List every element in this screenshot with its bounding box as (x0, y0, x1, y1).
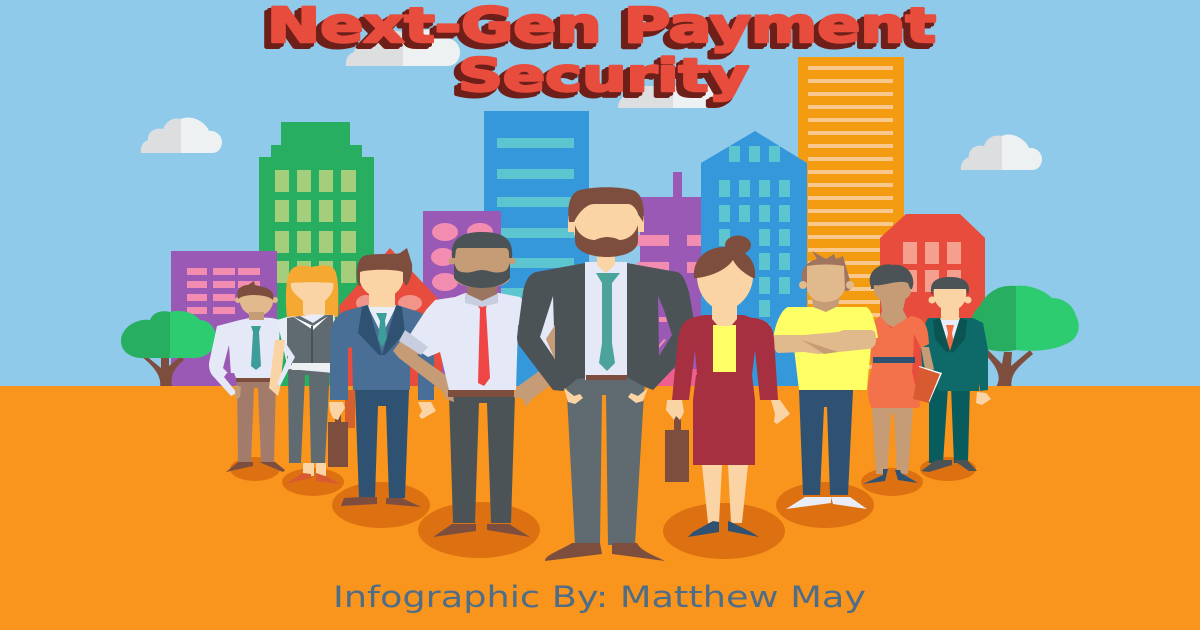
building: red right (880, 214, 985, 387)
building: blue peaked (701, 131, 807, 387)
person: woman in grey vest (269, 265, 341, 484)
cloud: top left (346, 29, 460, 66)
building: purple centre with ovals (423, 211, 501, 387)
title line one: extruded shadow: Next-Gen Payment (264, 1, 933, 57)
building: orange tower (798, 57, 904, 387)
building: green tower (259, 122, 374, 387)
building: purple left (171, 251, 277, 387)
person: man in yellow t-shirt (773, 251, 878, 509)
title line two: Security (458, 49, 749, 102)
title (261, 0, 936, 107)
byline: Infographic By: Matthew May (333, 580, 866, 614)
tree: right (971, 286, 1079, 391)
title line one: extruded shadow: Next-Gen Payment (261, 3, 930, 59)
person: central bearded man in grey suit (517, 187, 697, 561)
person: teal suit man (921, 277, 991, 472)
title line two: extruded shadow: Security (455, 52, 746, 105)
sky (0, 0, 1200, 387)
tree: left (121, 311, 216, 387)
cloud: right (961, 135, 1042, 170)
person: woman in orange dress (863, 264, 942, 484)
building: red roof house (339, 248, 442, 387)
person: man in blue suit (328, 248, 436, 507)
cloud: left (141, 118, 222, 153)
title line two: extruded shadow: Security (452, 54, 743, 107)
person: bearded man with hands on hips (393, 232, 554, 537)
shadows under figures (230, 457, 976, 559)
building: purple spire (637, 172, 702, 387)
building: blue tower (484, 111, 589, 387)
person: woman in red suit (665, 236, 790, 537)
title line two: extruded shadow (452, 52, 746, 107)
person: small man in white shirt (209, 281, 285, 472)
ground (0, 386, 1200, 630)
cloud: top centre (618, 86, 728, 108)
